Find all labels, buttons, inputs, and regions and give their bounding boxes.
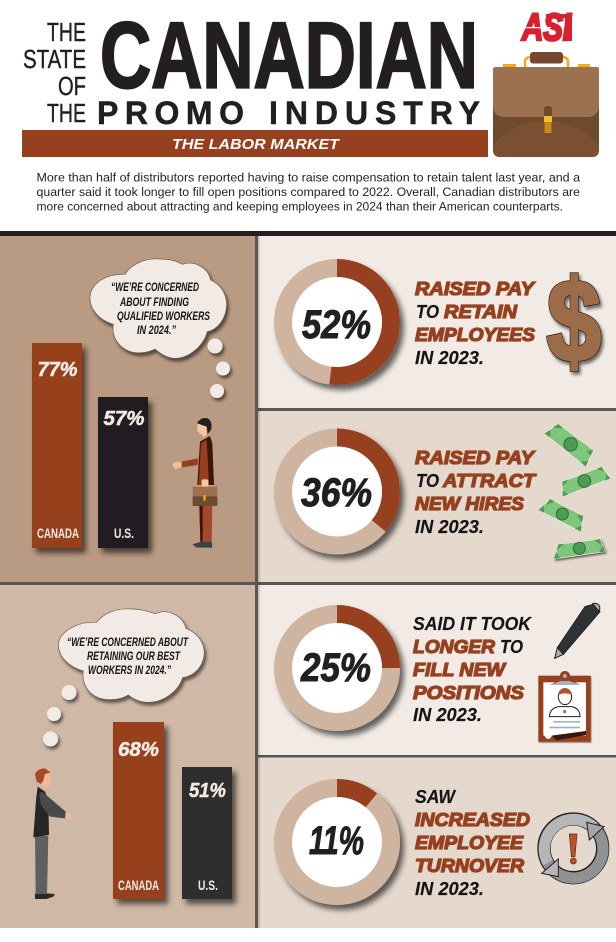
label: raised pay to attract new hires: IN 2023. xyxy=(415,516,484,537)
intro paragraph xyxy=(36,170,580,214)
icon: dollar sign: $ xyxy=(547,256,601,386)
title: the state of the: OF xyxy=(58,71,86,101)
label: saw increased employee turnover: TURNOVER xyxy=(415,855,525,876)
label: raised pay to retain employees: IN 2023. xyxy=(415,347,484,368)
label: raised pay to retain employees: RETAIN xyxy=(444,301,518,322)
bar: u.s. 57% xyxy=(98,397,148,548)
panel: longer to fill xyxy=(258,585,616,755)
panel: increased turnover xyxy=(258,758,616,928)
label: raised pay to attract new hires xyxy=(415,447,537,537)
icon: falling money xyxy=(538,424,611,559)
panel: raised pay to attract xyxy=(258,411,616,582)
title: promo industry: INDUSTRY xyxy=(269,95,480,131)
label: said it took longer to fill new positions: LONGER xyxy=(413,636,496,657)
intro paragraph: more concerned about attracting and keeping employees in 2024 than their American counterparts. xyxy=(36,200,563,214)
bar: u.s. 51%: 51% xyxy=(189,780,226,802)
title: the state of the: THE xyxy=(47,17,86,47)
bar: u.s. 57%: U.S. xyxy=(114,526,134,541)
label: saw increased employee turnover xyxy=(415,786,530,899)
title: canadian: CANADIAN xyxy=(100,2,478,108)
bar: canada 68% xyxy=(113,722,164,899)
label: raised pay to attract new hires: ATTRACT xyxy=(442,470,537,491)
bar: canada 68%: CANADA xyxy=(118,878,159,893)
donut: 36%: 36% xyxy=(301,471,372,515)
title: promo industry xyxy=(97,95,480,131)
label: raised pay to attract new hires: RAISED PAY xyxy=(415,447,536,468)
icon: pen xyxy=(555,603,600,658)
label: raised pay to retain employees: TO xyxy=(416,301,440,322)
header title xyxy=(23,2,480,131)
icon: dollar sign: $ xyxy=(547,256,601,386)
label: saw increased employee turnover: EMPLOYEE xyxy=(415,832,524,853)
bar: canada 68%: 68% xyxy=(118,739,159,761)
bar: canada 77%: 77% xyxy=(38,359,78,381)
label: raised pay to retain employees: EMPLOYEES xyxy=(415,324,536,345)
icon: briefcase xyxy=(493,52,599,157)
logo: ASI: ASI xyxy=(521,7,572,49)
thought bubble: retaining workers: “WE’RE CONCERNED ABOUT xyxy=(67,635,189,649)
panel: retaining workers xyxy=(0,585,255,928)
bar: canada 77% xyxy=(32,343,82,548)
intro paragraph: More than half of distributors reported having to raise compensation to retain talent last year, and a xyxy=(36,170,580,184)
label: saw increased employee turnover: SAW xyxy=(415,786,456,807)
thought bubble: finding workers: QUALIFIED WORKERS xyxy=(117,309,211,323)
banner: the labor market: THE LABOR MARKET xyxy=(172,136,341,153)
label: raised pay to attract new hires: TO xyxy=(416,470,440,491)
label: raised pay to retain employees xyxy=(415,278,536,368)
thought bubble: retaining workers: RETAINING OUR BEST xyxy=(87,649,181,663)
intro paragraph: quarter said it took longer to fill open positions compared to 2022. Overall, Canadian distributors are xyxy=(36,185,580,199)
label: saw increased employee turnover: IN 2023. xyxy=(415,878,484,899)
thought bubble: retaining workers: WORKERS IN 2024.” xyxy=(88,663,172,677)
thought bubble: finding workers: IN 2024.” xyxy=(137,323,177,337)
label: saw increased employee turnover: INCREASED xyxy=(415,809,530,830)
label: said it took longer to fill new positions: TO xyxy=(500,636,524,657)
figure: man with briefcase xyxy=(172,418,217,548)
panel: raised pay to retain xyxy=(258,236,616,408)
figure: man in black suit xyxy=(33,768,73,899)
icon: clipboard with resume xyxy=(538,671,591,742)
donut: 52%: 52% xyxy=(302,303,371,347)
label: said it took longer to fill new positions: POSITIONS xyxy=(413,682,525,703)
bar: u.s. 51%: U.S. xyxy=(198,878,218,893)
donut: 25% xyxy=(274,605,400,731)
thought bubble: finding workers xyxy=(90,259,230,398)
title: the state of the xyxy=(23,17,86,128)
gutter shadows xyxy=(258,236,261,928)
panel: finding workers xyxy=(0,236,255,582)
bar: u.s. 57%: 57% xyxy=(104,408,145,430)
label: said it took longer to fill new positions: FILL NEW xyxy=(413,659,507,680)
donut: 36% xyxy=(274,428,400,554)
label: said it took longer to fill new positions: SAID IT TOOK xyxy=(413,613,533,634)
bar: u.s. 51% xyxy=(182,767,232,899)
title: the state of the: THE xyxy=(47,98,86,128)
donut: 11%: 11% xyxy=(309,819,364,863)
thought bubble: finding workers: “WE’RE CONCERNED xyxy=(111,280,199,294)
title: promo industry: PROMO xyxy=(97,95,244,131)
bar: canada 77%: CANADA xyxy=(37,526,79,541)
label: said it took longer to fill new positions: IN 2023. xyxy=(413,704,482,725)
label: said it took longer to fill new positions xyxy=(413,613,533,725)
label: raised pay to attract new hires: NEW HIRES xyxy=(415,493,525,514)
donut: 11% xyxy=(274,779,400,905)
donut: 52% xyxy=(274,259,400,385)
label: raised pay to retain employees: RAISED PAY xyxy=(415,278,536,299)
title: the state of the: STATE xyxy=(23,44,86,74)
banner: the labor market xyxy=(22,130,488,157)
donut: 25%: 25% xyxy=(300,646,371,690)
icon: turnover arrows xyxy=(542,819,604,878)
thought bubble: finding workers: ABOUT FINDING xyxy=(119,295,189,309)
thought bubble: retaining workers xyxy=(43,609,204,746)
